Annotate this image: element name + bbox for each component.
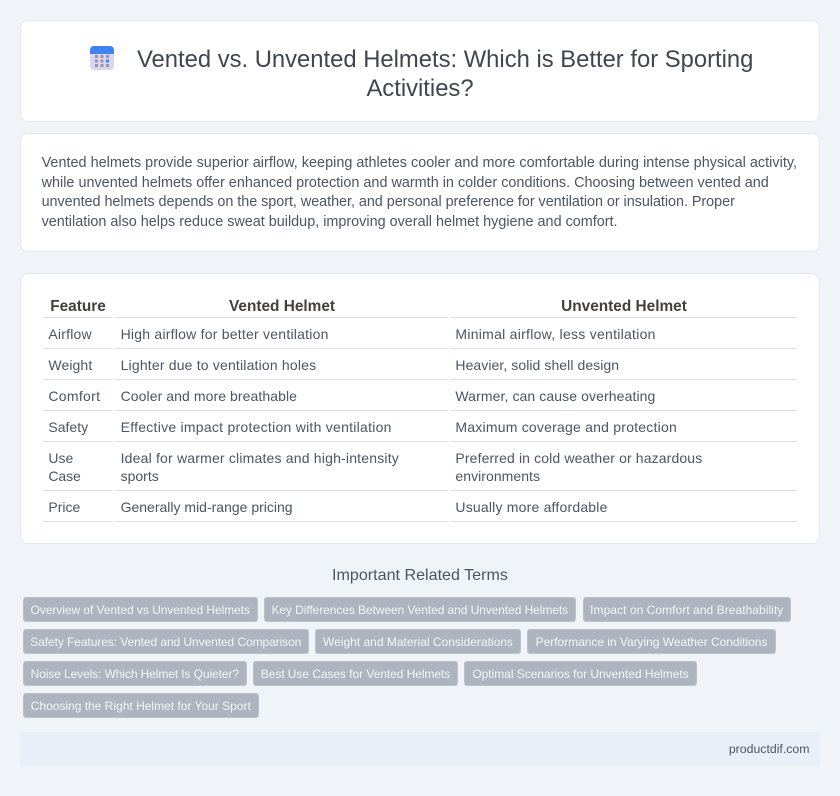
row: use case: Preferred in cold weather or hazardous: [455, 450, 702, 466]
row: comfort: Cooler and more breathable: [121, 388, 297, 404]
row: price: Price: [48, 499, 80, 515]
table header: Feature: [50, 298, 106, 315]
row: price: [48, 499, 608, 515]
table header: Unvented Helmet: [561, 298, 687, 315]
row: weight: Weight: [48, 357, 92, 373]
row: use case: Case: [48, 468, 81, 484]
row: weight: Heavier, solid shell design: [455, 357, 619, 373]
tag: Optimal Scenarios for Unvented Helmets: [472, 667, 689, 681]
table header: Vented Helmet: [229, 298, 335, 315]
row: price: Usually more affordable: [455, 499, 608, 515]
title: Vented vs. Unvented Helmets: Which is Better for Sporting: [137, 46, 753, 73]
row: airflow: Airflow: [48, 326, 92, 342]
tag: Key Differences Between Vented and Unvented Helmets: [271, 603, 568, 617]
row: weight: Lighter due to ventilation holes: [121, 357, 316, 373]
row: weight: [48, 357, 619, 373]
tag list: related terms: [23, 597, 791, 718]
row: airflow: Minimal airflow, less ventilation: [455, 326, 656, 342]
row: airflow: [48, 326, 656, 342]
row: use case: Ideal for warmer climates and high-intensity: [121, 450, 399, 466]
tag: Impact on Comfort and Breathability: [590, 603, 783, 617]
row: comfort: Comfort: [48, 388, 100, 404]
tag: Weight and Material Considerations: [323, 635, 513, 649]
tag: Noise Levels: Which Helmet Is Quieter?: [31, 667, 239, 681]
title: [137, 46, 753, 102]
heading: related terms: Important Related Terms: [332, 566, 508, 584]
title: Activities?: [366, 75, 474, 102]
row: use case: environments: [455, 468, 540, 484]
tag: [464, 661, 697, 686]
row: safety: [48, 419, 677, 435]
icon: calendar: [90, 46, 114, 70]
tag: Choosing the Right Helmet for Your Sport: [31, 699, 251, 713]
row: price: Generally mid-range pricing: [121, 499, 293, 515]
tag: [315, 629, 521, 654]
text block: introduction: ventilation also helps reduce sweat buildup, improving overall helmet hygiene and comfort.: [42, 214, 618, 230]
row: comfort: Warmer, can cause overheating: [455, 388, 655, 404]
row: use case: [48, 450, 702, 484]
tag: [23, 629, 308, 654]
text block: introduction: Vented helmets provide superior airflow, keeping athletes cooler and more comfortable during intense physical activity,: [42, 155, 797, 171]
tag: Best Use Cases for Vented Helmets: [261, 667, 450, 681]
footer text: source: productdif.com: [729, 742, 810, 756]
tag: [253, 661, 458, 686]
tag: [23, 661, 246, 686]
tag: Performance in Varying Weather Conditions: [536, 635, 767, 649]
row: safety: Safety: [48, 419, 88, 435]
text block: introduction: [42, 155, 797, 230]
text block: introduction: unvented helmets depends on the sport, weather, and personal preference for ventilation or insulation. Proper: [42, 194, 735, 210]
tag: Safety Features: Vented and Unvented Comparison: [30, 635, 301, 649]
tag: [23, 693, 258, 718]
tag: [527, 629, 776, 654]
row: airflow: High airflow for better ventilation: [121, 326, 329, 342]
row: comfort: [48, 388, 655, 404]
text block: introduction: while unvented helmets offer enhanced protection and warmth in colder conditions. Choosing between vented and: [42, 175, 769, 191]
panel: comparison table: [20, 273, 820, 544]
tag: [264, 597, 576, 622]
tag: [23, 597, 258, 622]
tag: [582, 597, 791, 622]
row: safety: Maximum coverage and protection: [455, 419, 677, 435]
panel: title card: [20, 20, 820, 122]
table header: [50, 298, 687, 315]
row: use case: Use: [48, 450, 73, 466]
tag: Overview of Vented vs Unvented Helmets: [30, 603, 250, 617]
panel: introduction: [20, 133, 820, 252]
footer bar: [20, 732, 820, 766]
row: use case: sports: [121, 468, 159, 484]
row: safety: Effective impact protection with ventilation: [121, 419, 392, 435]
